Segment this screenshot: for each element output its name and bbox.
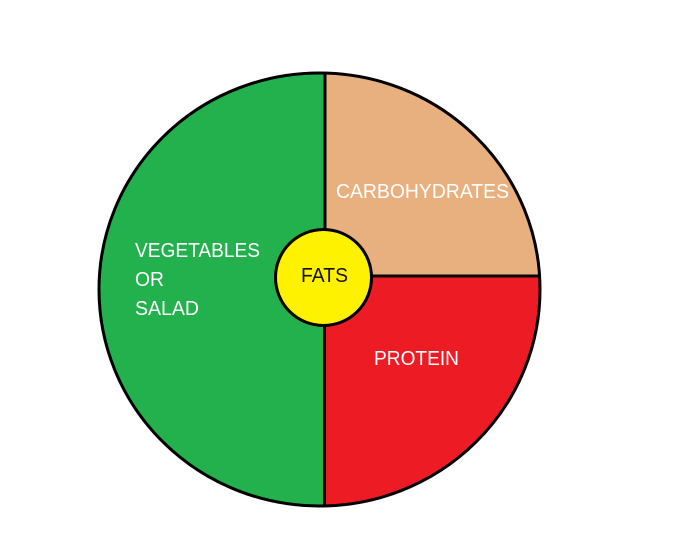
label: protein: PROTEIN xyxy=(374,348,459,370)
label: carbohydrates: CARBOHYDRATES xyxy=(336,181,509,203)
label: vegetables or salad: SALAD xyxy=(135,298,199,320)
label: fats: FATS xyxy=(301,265,348,287)
panel: carbohydrates quarter xyxy=(326,74,538,274)
plate diagram xyxy=(98,72,542,508)
panel: fats centre circle xyxy=(276,230,372,326)
label: vegetables or salad: OR xyxy=(135,269,164,291)
label: vegetables or salad: VEGETABLES xyxy=(135,240,260,262)
label: vegetables or salad xyxy=(135,240,260,320)
panel: vegetables or salad half xyxy=(100,74,324,504)
panel: protein quarter xyxy=(326,278,538,504)
plate outline and dividers xyxy=(99,72,541,506)
